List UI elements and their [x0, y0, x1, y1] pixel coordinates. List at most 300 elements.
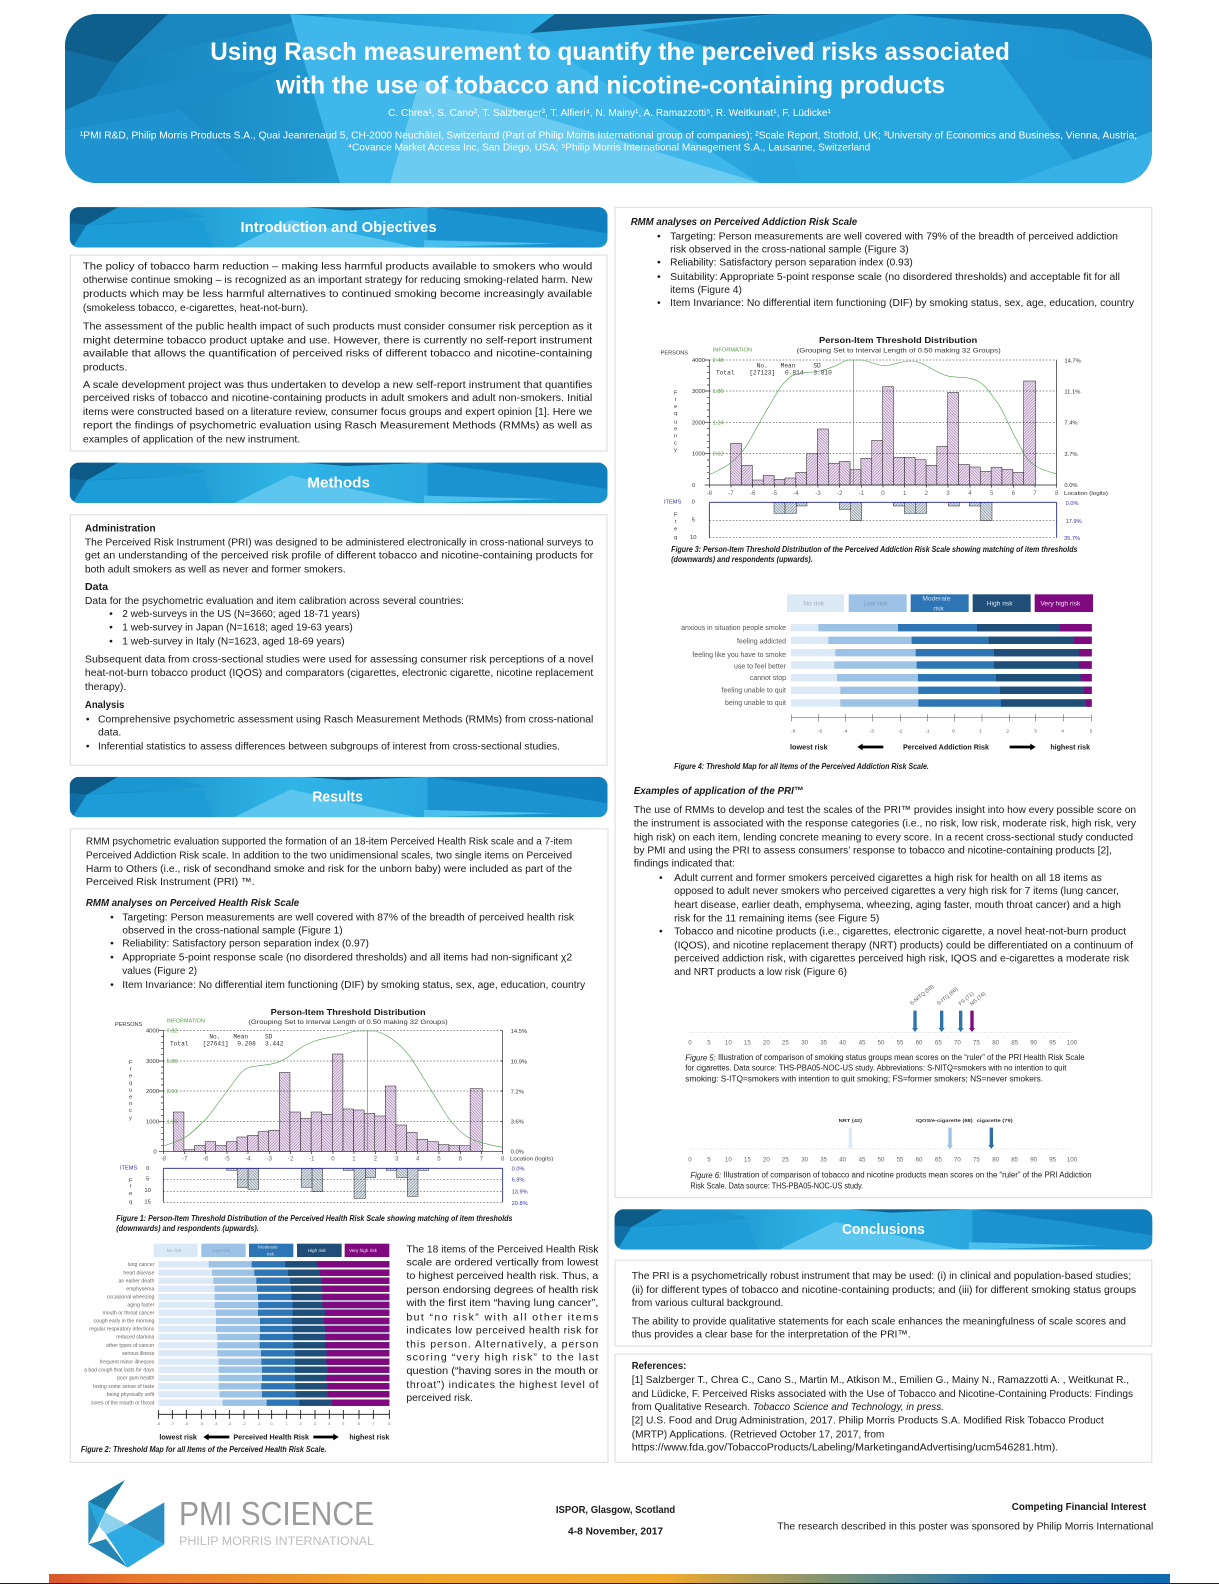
figure 5: ruler of health risk by smoking status: 85 — [1011, 1040, 1019, 1047]
figure 1: person-item threshold distribution, health risk: 1.95 — [167, 1119, 178, 1125]
item labels: poor gum health — [117, 1376, 154, 1382]
figure 6: ruler of addiction risk by product: 90 — [1030, 1156, 1038, 1163]
caption: figure 4: Figure 4: Threshold Map for all Items of the Perceived Addiction Risk Scale. — [674, 762, 929, 771]
text: examples of application: Examples of application of the PRI™ — [634, 785, 804, 797]
figure 6: ruler of addiction risk by product: 10 — [725, 1156, 732, 1163]
figure 6: ruler of addiction risk by product: 45 — [859, 1156, 866, 1163]
axis labels: e — [129, 1094, 132, 1100]
figure 1: person-item threshold distribution, health risk: ITEMS — [120, 1165, 138, 1171]
figure 1: person-item threshold distribution, health risk: 8 — [501, 1156, 505, 1163]
figure 5: ruler of health risk by smoking status: 5 — [707, 1040, 711, 1047]
figure 1: person-item threshold distribution, health risk: 20.8% — [512, 1201, 528, 1207]
axis labels: q — [674, 411, 677, 417]
figure 1: person-item threshold distribution, health risk: r — [130, 1184, 132, 1190]
figure 3: person-item threshold distribution, addiction risk: F — [674, 512, 678, 518]
text: explanation beside figure 2: to highest perceived health risk. Thus, a — [406, 1270, 599, 1282]
text: RMM analyses on perceived health risk scale: Reliability: Satisfactory person separation index (0.97) — [122, 938, 369, 950]
figure 1: person-item threshold distribution, health risk: 13.9% — [512, 1189, 528, 1195]
figure 3: person-item threshold distribution, addiction risk: -4 — [793, 490, 799, 497]
axis labels — [661, 350, 1108, 497]
caption: figure 3: Figure 3: Person-Item Threshold Distribution of the Perceived Addiction Risk Scale showing matching of item thresholds — [671, 545, 1078, 554]
figure 4: threshold map, addiction risk — [681, 594, 1093, 752]
scale axis: 7 — [372, 1421, 375, 1426]
title: Using Rasch measurement to quantify the perceived risks associated — [210, 39, 1010, 66]
figure 3: person-item threshold distribution, addiction risk: INFORMATION — [713, 347, 752, 353]
axis labels: c — [129, 1108, 132, 1114]
figure 3: person-item threshold distribution, addiction risk: -6 — [750, 490, 756, 497]
scale axis: -6 — [791, 728, 796, 734]
item labels: sores of the mouth or throat — [91, 1400, 155, 1406]
caption: figure 5 — [685, 1053, 1085, 1083]
figure 3: person-item threshold distribution, addiction risk: Person-Item Threshold Distribution — [819, 335, 977, 345]
arrow: cigarette: cigarette (79) — [977, 1118, 1013, 1123]
caption: figure 1: Figure 1: Person-Item Threshold Distribution of the Perceived Health Risk Scale showing matching of item thresholds — [116, 1214, 513, 1223]
figure 1: person-item threshold distribution, health risk: 4 — [416, 1156, 420, 1163]
text: examples of application: risk for the 11 remaining items (see Figure 5) — [674, 912, 879, 924]
text: references: https://www.fda.gov/TobaccoProducts/Labeling/MarketingandAdvertising/ucm546281.htm). — [632, 1442, 1058, 1454]
figure 5: ruler of health risk by smoking status: 95 — [1049, 1040, 1057, 1047]
figure 1: person-item threshold distribution, health risk: 7 — [480, 1156, 484, 1163]
figure 1: person-item threshold distribution, health risk: 5 — [146, 1177, 149, 1183]
text: methods: 1 web-survey in Italy (N=1623, aged 18-69 years) — [122, 635, 345, 647]
curve: information function — [163, 1031, 503, 1147]
figure 1: person-item threshold distribution, health risk: 6 — [459, 1156, 463, 1163]
text: introduction: The assessment of the public health impact of such products must consider consumer risk perception as it — [83, 320, 592, 332]
figure 3: person-item threshold distribution, addiction risk: 5 — [692, 517, 695, 523]
text: examples of application: high risk) on each item, lending concrete meaning to every score. In a recent cross-sectional study conducted — [634, 831, 1133, 843]
figure 1: person-item threshold distribution, health risk: 5.86 — [167, 1059, 178, 1065]
axis caption and arrows: Perceived Health Risk — [233, 1435, 309, 1442]
caption: figure 3: (downwards) and respondents (upwards). — [671, 555, 813, 564]
figure 1: person-item threshold distribution, health risk: -5 — [224, 1156, 230, 1163]
panel: methods box — [70, 515, 607, 765]
item labels — [84, 1262, 155, 1406]
text: RMM analyses on perceived health risk scale: • — [110, 911, 114, 923]
figure 3: person-item threshold distribution, addiction risk: -8 — [707, 490, 713, 497]
figure 3: person-item threshold distribution, addiction risk: Mean — [781, 362, 796, 369]
axis labels: 0 — [153, 1149, 157, 1155]
figure 3: person-item threshold distribution, addiction risk: 35.7% — [1064, 536, 1080, 542]
scale axis: 5 — [342, 1421, 345, 1426]
scale axis: 4 — [1061, 728, 1064, 734]
text: references: and Lüdicke, F. Perceived Risks associated with the Use of Tobacco and Nicotine-Containing Products: Findings — [632, 1388, 1133, 1400]
text: examples of application: • — [659, 872, 663, 884]
item labels: regular respiratory infections — [89, 1327, 155, 1333]
footer: competing financial interest: The research described in this poster was sponsored by Philip Morris International — [777, 1520, 1153, 1532]
text: explanation beside figure 2: perceived risk. — [406, 1392, 473, 1404]
axis labels: 0.0% — [511, 1149, 524, 1155]
axis labels: 4000 — [146, 1029, 160, 1035]
item labels: reduced stamina — [116, 1335, 154, 1341]
item labels: heart disease — [123, 1270, 154, 1276]
heading bar: methods — [70, 462, 608, 504]
text: explanation beside figure 2: with the first item “having lung cancer”, — [405, 1297, 598, 1309]
text: results introduction: Perceived Addiction Risk scale. In addition to the two unidimensional scales, two single items on Perceived — [86, 850, 572, 862]
axis labels: 3000 — [146, 1059, 160, 1065]
text: conclusions: from various cultural background. — [632, 1297, 783, 1309]
axis labels — [115, 1022, 553, 1163]
item labels: feeling like you have to smoke — [692, 652, 786, 659]
figure 5: ruler of health risk by smoking status — [688, 984, 1078, 1047]
legend: High risk — [308, 1248, 326, 1253]
figure 3: person-item threshold distribution, addiction risk: (Grouping Set to Interval Length of 0.50 making 32 Groups) — [797, 348, 1001, 355]
item labels: a bad cough that lasts for days — [84, 1367, 155, 1373]
figure 3: person-item threshold distribution, addiction risk: 0.0% — [1066, 501, 1079, 507]
text: methods: Administration — [85, 522, 156, 534]
text: examples of application: the instrument is associated with the response categories (i.e., no risk, low risk, moderate risk, high risk, very — [634, 817, 1137, 829]
text: methods: 2 web-surveys in the US (N=3660; aged 18-71 years) — [122, 608, 360, 620]
text: explanation beside figure 2: person endorsing degrees of health risk — [406, 1284, 599, 1296]
text: introduction: items were constructed based on a literature review, consumer focus groups and expert opinion [1]. Here we — [83, 406, 592, 418]
text: methods: both adult smokers as well as never and former smokers. — [85, 564, 346, 576]
legend: Moderate — [258, 1244, 278, 1249]
legend: Low risk — [863, 601, 888, 608]
text: explanation beside figure 2: this person. Alternatively, a person — [406, 1339, 599, 1351]
arrow: S-NITQ — [909, 984, 935, 1032]
axis labels: u — [674, 420, 677, 426]
figure 1: person-item threshold distribution, health risk: Total — [170, 1041, 189, 1048]
figure 6: ruler of addiction risk by product: 5 — [707, 1156, 711, 1163]
figure 3: person-item threshold distribution, addiction risk: e — [674, 526, 677, 532]
figure 6: ruler of addiction risk by product: 25 — [782, 1156, 789, 1163]
axis labels: c — [674, 440, 677, 446]
scale axis: 0 — [952, 728, 955, 734]
text: examples of application: The use of RMMs to develop and test the scales of the PRI™ provides insight into how every possible score on — [634, 804, 1136, 816]
axis labels: y — [674, 448, 677, 454]
axis labels: 4000 — [692, 358, 706, 364]
figure 3: person-item threshold distribution, addiction risk: 0 — [881, 490, 885, 497]
text: methods: Inferential statistics to assess differences between subgroups of interest from cross-sectional studies. — [98, 741, 560, 753]
figure 5: ruler of health risk by smoking status: 15 — [744, 1040, 751, 1047]
axis labels: 14.7% — [1064, 358, 1081, 364]
text: introduction: products. — [83, 362, 127, 374]
figure 3: person-item threshold distribution, addiction risk: 3.810 — [813, 370, 832, 377]
text: introduction: The policy of tobacco harm reduction – making less harmful products available to smokers who would — [83, 261, 592, 273]
item labels: feeling unable to quit — [722, 687, 786, 694]
item labels: anxious in situation people smoke — [681, 625, 786, 632]
item labels: an earlier death — [118, 1278, 154, 1284]
bars: items — [774, 502, 992, 521]
figure 1: person-item threshold distribution, health risk: -8 — [161, 1156, 167, 1163]
text: RMM analyses on perceived health risk scale: • — [110, 979, 114, 991]
figure 1: person-item threshold distribution, health risk: No. — [209, 1034, 220, 1041]
figure 3: person-item threshold distribution, addiction risk: Total — [716, 370, 735, 377]
curve: information function — [709, 360, 1057, 475]
arrow: FS: FS (71) — [958, 991, 975, 1007]
arrow: NS — [969, 991, 987, 1032]
scale axis: 3 — [1034, 728, 1037, 734]
axis labels: n — [674, 434, 677, 440]
figure 3: person-item threshold distribution, addiction risk — [661, 335, 1108, 542]
figure 6: ruler of addiction risk by product: 85 — [1011, 1156, 1019, 1163]
figure 6: ruler of addiction risk by product: 100 — [1067, 1156, 1078, 1163]
legend: risk — [933, 606, 944, 613]
text: RMM analyses on perceived health risk scale: • — [110, 938, 114, 950]
caption: figure 5: smoking: S-ITQ=smokers with intention to quit smoking; FS=former smokers; NS=never smokers. — [685, 1074, 1043, 1083]
figure 3: person-item threshold distribution, addiction risk: 1.86 — [713, 389, 724, 395]
figure 5: ruler of health risk by smoking status: 20 — [763, 1040, 770, 1047]
text: RMM analyses on perceived health risk scale: Targeting: Person measurements are well covered with 87% of the breadth of perceived health risk — [122, 911, 575, 923]
panel: conclusions box — [615, 1260, 1152, 1346]
axis labels: F — [129, 1060, 133, 1066]
figure 1: person-item threshold distribution, health risk: 0 — [146, 1166, 150, 1172]
text: explanation beside figure 2: scale are ordered vertically from lowest — [406, 1257, 598, 1269]
heading bar: introduction — [70, 207, 608, 248]
figure 5: ruler of health risk by smoking status: 45 — [859, 1040, 866, 1047]
figure 5: ruler of health risk by smoking status: 75 — [973, 1040, 980, 1047]
text: RMM analyses on perceived health risk scale — [86, 897, 586, 991]
affiliations: ¹PMI R&D, Philip Morris Products S.A., Quai Jeanrenaud 5, CH-2000 Neuchâtel, Switzerland (Part of Philip Morris International group of companies); ²Scale Report, Stotfold, UK; ³University of Economics and Business, Vienna, Austria; — [80, 129, 1137, 141]
text: RMM analyses on perceived health risk scale: • — [110, 952, 114, 964]
heading: introduction and objectives: Introduction and Objectives — [241, 219, 437, 236]
text: introduction: examples of application of the new instrument. — [83, 433, 300, 445]
figure 1: person-item threshold distribution, health risk: 0.208 — [237, 1041, 256, 1048]
text: examples of application: findings indicated that: — [634, 858, 735, 870]
axis labels: 14.5% — [511, 1029, 527, 1035]
scale axis: 4 — [328, 1421, 331, 1426]
axis labels: Location (logits) — [1064, 491, 1108, 497]
figure 1: person-item threshold distribution, health risk: -2 — [288, 1156, 294, 1163]
figure 3: person-item threshold distribution, addiction risk: 2.48 — [713, 358, 724, 364]
figure 6: ruler of addiction risk by product: 35 — [820, 1156, 828, 1163]
text: methods: 1 web-survey in Japan (N=1618; aged 19-63 years) — [122, 621, 353, 633]
text: explanation beside figure 2: but “no risk” with all other items — [406, 1311, 598, 1323]
figure 3: person-item threshold distribution, addiction risk: 3 — [946, 490, 950, 497]
item labels: emphysema — [126, 1286, 154, 1292]
text: results introduction — [86, 835, 572, 888]
legend: Very high risk — [349, 1248, 378, 1253]
text: methods: therapy). — [85, 681, 126, 693]
axis labels: Location (logits) — [510, 1157, 553, 1163]
figure 3: person-item threshold distribution, addiction risk: -5 — [772, 490, 778, 497]
text: examples of application — [634, 785, 1137, 978]
text: RMM analyses on perceived health risk scale: RMM analyses on Perceived Health Risk Scale — [86, 897, 299, 909]
text: RMM analyses on perceived addiction risk scale: • — [657, 271, 661, 283]
figure 1: person-item threshold distribution, health risk: 5 — [437, 1156, 441, 1163]
axis labels: 3.6% — [511, 1119, 524, 1125]
scale axis: -5 — [200, 1421, 204, 1426]
figure 3: person-item threshold distribution, addiction risk: 1 — [903, 490, 907, 497]
text: conclusions — [632, 1270, 1136, 1340]
figure 3: person-item threshold distribution, addiction risk: 2 — [925, 490, 929, 497]
axis labels: e — [674, 404, 677, 410]
figure 3: person-item threshold distribution, addiction risk: 4 — [968, 490, 972, 497]
figure 3: person-item threshold distribution, addiction risk: -1 — [859, 490, 865, 497]
footer: conference: 4-8 November, 2017 — [568, 1525, 663, 1537]
figure 3: person-item threshold distribution, addiction risk: 7 — [1033, 490, 1037, 497]
item labels: lung cancer — [128, 1262, 155, 1268]
text: explanation beside figure 2 — [405, 1244, 599, 1404]
figure 1: person-item threshold distribution, health risk: 15 — [144, 1200, 151, 1206]
figure 6: ruler of addiction risk by product: 80 — [992, 1156, 1000, 1163]
text: examples of application: heart disease, earlier death, emphysema, wheezing, aging faster, mouth throat cancer) and a high — [674, 899, 1121, 911]
text: examples of application: • — [659, 925, 663, 937]
figure 5: ruler of health risk by smoking status: 55 — [897, 1040, 904, 1047]
text: introduction: (smokeless tobacco, e-cigarettes, heat-not-burn). — [83, 302, 308, 314]
figure 6: ruler of addiction risk by product: 65 — [935, 1156, 942, 1163]
legend: Low risk — [213, 1248, 231, 1253]
figure 5: ruler of health risk by smoking status: 90 — [1030, 1040, 1038, 1047]
axis caption and arrows: highest risk — [1050, 745, 1090, 752]
item labels: aging faster — [127, 1303, 155, 1309]
scale axis: 2 — [300, 1421, 303, 1426]
figure 6: ruler of addiction risk by product: 75 — [973, 1156, 980, 1163]
axis labels: 1000 — [692, 452, 706, 458]
scale axis: 5 — [1090, 728, 1093, 734]
caption: figure 6: Figure 6: Illustration of comparison of tobacco and nicotine products mean scores on the “ruler” of the PRI Addiction — [690, 1170, 1092, 1179]
affiliations — [80, 129, 1137, 153]
footer: competing financial interest — [777, 1501, 1153, 1532]
axis labels: q — [129, 1081, 132, 1087]
bars: persons — [731, 381, 1036, 485]
item labels: serious illness — [122, 1351, 155, 1357]
item labels: use to feel better — [734, 663, 787, 670]
scale axis: -1 — [257, 1421, 261, 1426]
axis labels: 7.4% — [1064, 421, 1078, 427]
text: methods: heat-not-burn tobacco product (IQOS) and comparators (cigarettes, electronic cigarette, nicotine replacement — [85, 667, 593, 679]
figure 1: person-item threshold distribution, health risk: 3 — [395, 1156, 399, 1163]
figure 5: ruler of health risk by smoking status: 100 — [1067, 1040, 1078, 1047]
figure 6: ruler of addiction risk by product: 60 — [916, 1156, 923, 1163]
item labels: cough early in the morning — [94, 1319, 154, 1325]
heading bar: conclusions — [614, 1209, 1152, 1250]
text: references: References: — [632, 1360, 686, 1372]
item labels: mouth or throat cancer — [102, 1310, 155, 1316]
caption: figure 5: for cigarettes. Data source: THS-PBA05-NOC-US study. Abbreviations: S-NITQ=smokers with no intention to quit — [685, 1063, 1067, 1072]
figure 1: person-item threshold distribution, health risk: 10 — [144, 1188, 152, 1194]
text: RMM analyses on perceived addiction risk scale — [631, 216, 1135, 309]
legend: Moderate — [922, 596, 951, 603]
text: methods: Subsequent data from cross-sectional studies were used for assessing consumer risk perceptions of a novel — [85, 654, 593, 666]
figure 1: person-item threshold distribution, health risk: -4 — [245, 1156, 251, 1163]
axis caption and arrows: lowest risk — [790, 745, 828, 752]
caption: figure 2: Figure 2: Threshold Map for all Items of the Perceived Health Risk Scale. — [81, 1445, 326, 1454]
text: methods: • — [109, 635, 113, 647]
figure 3: person-item threshold distribution, addiction risk: 0.814 — [785, 370, 804, 377]
axis labels: 3000 — [692, 389, 706, 395]
figure 1: person-item threshold distribution, health risk: 3.91 — [167, 1089, 178, 1095]
figure 1: person-item threshold distribution, health risk: q — [129, 1199, 132, 1205]
text: introduction: perceived risks of tobacco and nicotine-containing products in adult smokers and adult non-smokers. Initial — [83, 392, 592, 404]
arrow: cigarette — [977, 1118, 1013, 1149]
heading: conclusions: Conclusions — [842, 1221, 925, 1238]
text: introduction: available that allows the quantification of perceived risks of different tobacco and nicotine-containing — [83, 348, 592, 360]
figure 3: person-item threshold distribution, addiction risk: -7 — [728, 490, 734, 497]
axis labels: F — [674, 390, 678, 396]
text: explanation beside figure 2: scoring “very high risk” to the last — [406, 1352, 598, 1364]
scale axis: 2 — [1006, 728, 1009, 734]
axis caption and arrows — [790, 744, 1090, 752]
figure 1: person-item threshold distribution, health risk: 0 — [331, 1156, 335, 1163]
logo: PMI Science — [88, 1480, 375, 1568]
scale axis: -2 — [898, 728, 903, 734]
item labels — [681, 625, 787, 707]
stacked bars — [158, 1261, 389, 1406]
text: RMM analyses on perceived addiction risk scale: items (Figure 4) — [670, 284, 742, 296]
scale axis: -8 — [157, 1421, 161, 1426]
scale axis: -3 — [869, 728, 874, 734]
figure 2: threshold map, health risk — [84, 1244, 391, 1442]
axis labels: 11.1% — [1064, 389, 1080, 395]
text: examples of application: Tobacco and nicotine products (i.e., cigarettes, electronic cigarette, a novel heat-not-burn product — [674, 925, 1126, 937]
caption: figure 6 — [690, 1170, 1092, 1190]
text: examples of application: Adult current and former smokers perceived cigarettes a high risk for health on all 18 items as — [674, 872, 1102, 884]
axis caption and arrows: highest risk — [349, 1435, 389, 1442]
text: conclusions: thus provides a clear base for the interpretation of the PRI™. — [632, 1328, 911, 1340]
figure 5: ruler of health risk by smoking status: 50 — [878, 1040, 885, 1047]
arrow: IQOS/e-cigarette: IQOS/e-cigarette (68) — [916, 1118, 973, 1123]
figure 1: person-item threshold distribution, health risk: (Grouping Set to Interval Length of 0.50 making 32 Groups) — [248, 1019, 448, 1026]
arrow: IQOS/e-cigarette — [916, 1118, 973, 1149]
figure 1: person-item threshold distribution, health risk: 1 — [352, 1156, 356, 1163]
figure 1: person-item threshold distribution, health risk: 3.442 — [265, 1041, 284, 1048]
figure 3: person-item threshold distribution, addiction risk: SD — [813, 362, 821, 369]
axis labels: u — [129, 1087, 132, 1093]
text: RMM analyses on perceived addiction risk scale: Item Invariance: No differential item functioning (DIF) by smoking status, sex, age, education, country — [670, 297, 1135, 309]
text: RMM analyses on perceived addiction risk scale: • — [657, 297, 661, 309]
figure 3: person-item threshold distribution, addiction risk: 10 — [690, 535, 697, 541]
text: RMM analyses on perceived health risk scale: observed in the cross-national sample (Figure 1) — [122, 924, 343, 936]
scale axis — [157, 1410, 391, 1426]
figure 3: person-item threshold distribution, addiction risk: 8 — [1055, 490, 1059, 497]
item labels: being physically unfit — [107, 1392, 155, 1398]
figure 3: person-item threshold distribution, addiction risk: 17.9% — [1066, 519, 1082, 525]
text: RMM analyses on perceived addiction risk scale: risk observed in the cross-national sample (Figure 3) — [670, 244, 909, 256]
scale axis: 3 — [314, 1421, 317, 1426]
figure 5: ruler of health risk by smoking status: 25 — [782, 1040, 789, 1047]
text: references: [2] U.S. Food and Drug Administration, 2017. Philip Morris Products S.A. Modified Risk Tobacco Product — [632, 1414, 1104, 1426]
figure 3: person-item threshold distribution, addiction risk: 1.24 — [713, 421, 724, 427]
axis labels: n — [129, 1101, 132, 1107]
text: explanation beside figure 2: indicates low perceived health risk for — [406, 1324, 599, 1336]
figure 3: person-item threshold distribution, addiction risk: 5 — [990, 490, 994, 497]
text: methods: The Perceived Risk Instrument (PRI) was designed to be administered electronically in cross-national surveys to — [85, 536, 593, 548]
text: methods: Data — [85, 581, 108, 593]
figure 1: person-item threshold distribution, health risk: 0.0% — [512, 1167, 525, 1173]
figure 6: ruler of addiction risk by product: 0 — [688, 1156, 692, 1163]
text: RMM analyses on perceived addiction risk scale: Suitability: Appropriate 5-point response scale (no disordered thresholds) and acceptable fit for all — [670, 271, 1120, 283]
axis labels: 3.7% — [1064, 452, 1078, 458]
legend — [154, 1244, 389, 1257]
scale axis: 0 — [271, 1421, 274, 1426]
text: references: from Qualitative Research. Tobacco Science and Technology, in press. — [632, 1401, 944, 1413]
caption: figure 1: (downwards) and respondents (upwards). — [116, 1224, 259, 1233]
text: examples of application: (IQOS), and nicotine replacement therapy (NRT) products) could be differentiated on a continuum of — [674, 940, 1133, 952]
text: introduction: report the findings of psychometric evaluation using Rasch Measurement Methods (RMMs) as well as — [83, 419, 592, 431]
axis labels: r — [130, 1067, 132, 1073]
figure 5: ruler of health risk by smoking status: 30 — [801, 1040, 809, 1047]
figure 1: person-item threshold distribution, health risk: 7.82 — [167, 1029, 178, 1035]
axis labels: e — [129, 1074, 132, 1080]
figure 6: ruler of addiction risk by product: 40 — [839, 1156, 847, 1163]
figure 3: person-item threshold distribution, addiction risk: -2 — [837, 490, 843, 497]
footer colour bar — [49, 1574, 1170, 1584]
text: introduction: products which may be less harmful alternatives to continued smoking become increasingly available — [83, 288, 592, 300]
caption: figure 3 — [671, 545, 1078, 564]
legend: High risk — [987, 601, 1013, 608]
axis labels: 7.2% — [511, 1089, 524, 1095]
footer: competing financial interest: Competing Financial Interest — [1012, 1501, 1147, 1513]
figure 5: ruler of health risk by smoking status: 65 — [935, 1040, 942, 1047]
item labels: being unable to quit — [725, 700, 786, 707]
axis labels: 1000 — [146, 1119, 160, 1125]
text: methods: Data for the psychometric evaluation and item calibration across several countries: — [85, 595, 464, 607]
figure 1: person-item threshold distribution, health risk: Mean — [233, 1034, 248, 1041]
scale axis: -5 — [818, 728, 822, 734]
figure 3: person-item threshold distribution, addiction risk: ITEMS — [664, 499, 682, 505]
legend — [787, 594, 1093, 613]
caption: figure 5: Figure 5: Illustration of comparison of smoking status groups mean scores on the “ruler” of the PRI Health Risk Scale — [685, 1053, 1085, 1062]
